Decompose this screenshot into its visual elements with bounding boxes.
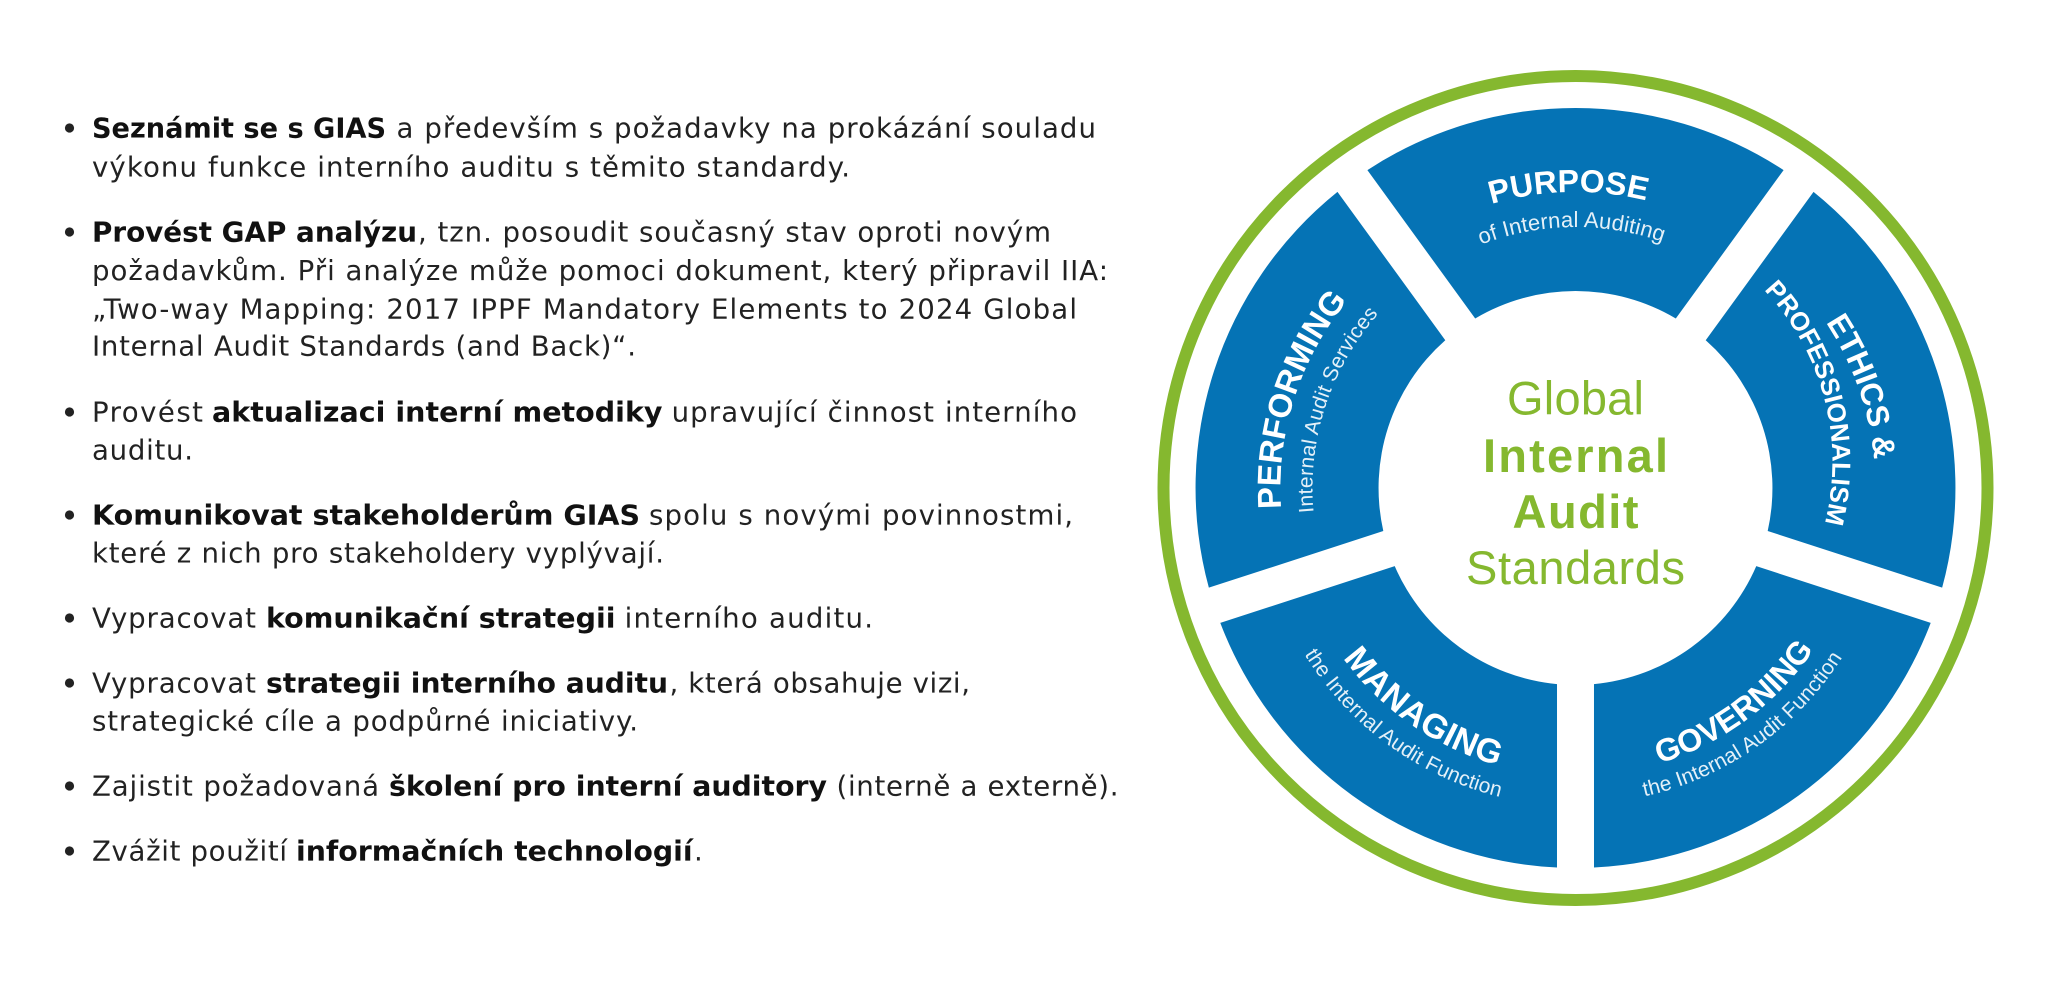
segment: managing: the Internal Audit Function bbox=[1306, 648, 1501, 797]
segment: purpose: of Internal Auditing bbox=[1479, 211, 1665, 245]
segment: performing bbox=[1196, 192, 1446, 588]
segment: ethics and professionalism bbox=[1706, 192, 1956, 588]
bullet 8: . bbox=[694, 834, 703, 867]
bullet 6: strategii interního auditu bbox=[266, 666, 668, 699]
bullet 4 bbox=[65, 498, 1073, 570]
bullet 7: Zajistit požadovaná bbox=[92, 769, 379, 802]
bullet 2: „Two-way Mapping: 2017 IPPF Mandatory Elements to 2024 Global bbox=[92, 292, 1077, 325]
bullet 1 bbox=[65, 112, 1096, 184]
bullet 2: , tzn. posoudit současný stav oproti novým bbox=[418, 216, 1051, 249]
segment: managing: MANAGING bbox=[1344, 645, 1501, 763]
center title: Audit bbox=[1512, 485, 1639, 538]
segment: ethics and professionalism: ETHICS & bbox=[1827, 312, 1894, 459]
bullet 8: Zvážit použití bbox=[92, 834, 288, 867]
bullet 7: (interně a externě). bbox=[836, 769, 1118, 802]
center title: Global bbox=[1507, 372, 1644, 424]
bullet 2: Provést GAP analýzu bbox=[92, 216, 417, 249]
segment: performing: Internal Audit Services bbox=[1298, 308, 1377, 512]
bullet 3: aktualizaci interní metodiky bbox=[212, 396, 663, 429]
bullet 2: Internal Audit Standards (and Back)“. bbox=[92, 330, 636, 363]
bullet 2: požadavkům. Při analýze může pomoci dokument, který připravil IIA: bbox=[92, 254, 1108, 287]
bullet 3 bbox=[65, 396, 1077, 466]
bullet 7 bbox=[65, 769, 1118, 802]
center title: Internal bbox=[1483, 429, 1668, 482]
bullet 5 bbox=[65, 602, 873, 635]
segment: governing: GOVERNING bbox=[1656, 642, 1810, 761]
bullet 5: Vypracovat bbox=[92, 602, 256, 635]
segment: purpose: PURPOSE bbox=[1488, 170, 1649, 204]
bullet 7: školení pro interní auditory bbox=[389, 769, 827, 802]
standards wheel bbox=[1158, 70, 1994, 906]
segment: governing bbox=[1594, 566, 1931, 868]
bullet 4: spolu s novými povinnostmi, bbox=[649, 498, 1073, 531]
bullet 3: Provést bbox=[92, 396, 203, 429]
bullet 1: a především s požadavky na prokázání souladu bbox=[396, 112, 1096, 145]
green outer ring bbox=[1164, 76, 1988, 900]
bullet 1: výkonu funkce interního auditu s těmito standardy. bbox=[92, 151, 850, 184]
bullet 8: informačních technologií bbox=[296, 834, 694, 867]
bullet 3: upravující činnost interního bbox=[672, 396, 1077, 429]
segment: ethics and professionalism: PROFESSIONALISM bbox=[1765, 279, 1850, 526]
bullet 5: interního auditu. bbox=[625, 602, 873, 635]
segment: managing bbox=[1220, 566, 1557, 868]
bullet 6: Vypracovat bbox=[92, 666, 256, 699]
segment: governing: the Internal Audit Function bbox=[1642, 653, 1842, 796]
center title: Standards bbox=[1466, 541, 1685, 594]
bullet 1: Seznámit se s GIAS bbox=[92, 112, 386, 145]
segment: performing: PERFORMING bbox=[1258, 292, 1344, 508]
bullet 5: komunikační strategii bbox=[266, 602, 616, 635]
bullet 8 bbox=[65, 834, 703, 867]
bullet 6: strategické cíle a podpůrné iniciativy. bbox=[92, 705, 638, 738]
bullet list bbox=[65, 112, 1118, 867]
bullet 4: které z nich pro stakeholdery vyplývají. bbox=[92, 537, 664, 570]
bullet 2 bbox=[65, 216, 1108, 363]
bullet 6 bbox=[65, 666, 970, 738]
center title bbox=[1466, 372, 1685, 594]
bullet 6: , která obsahuje vizi, bbox=[670, 666, 970, 699]
bullet 3: auditu. bbox=[92, 433, 193, 466]
segment: purpose bbox=[1367, 108, 1784, 318]
bullet 4: Komunikovat stakeholderům GIAS bbox=[92, 498, 640, 531]
